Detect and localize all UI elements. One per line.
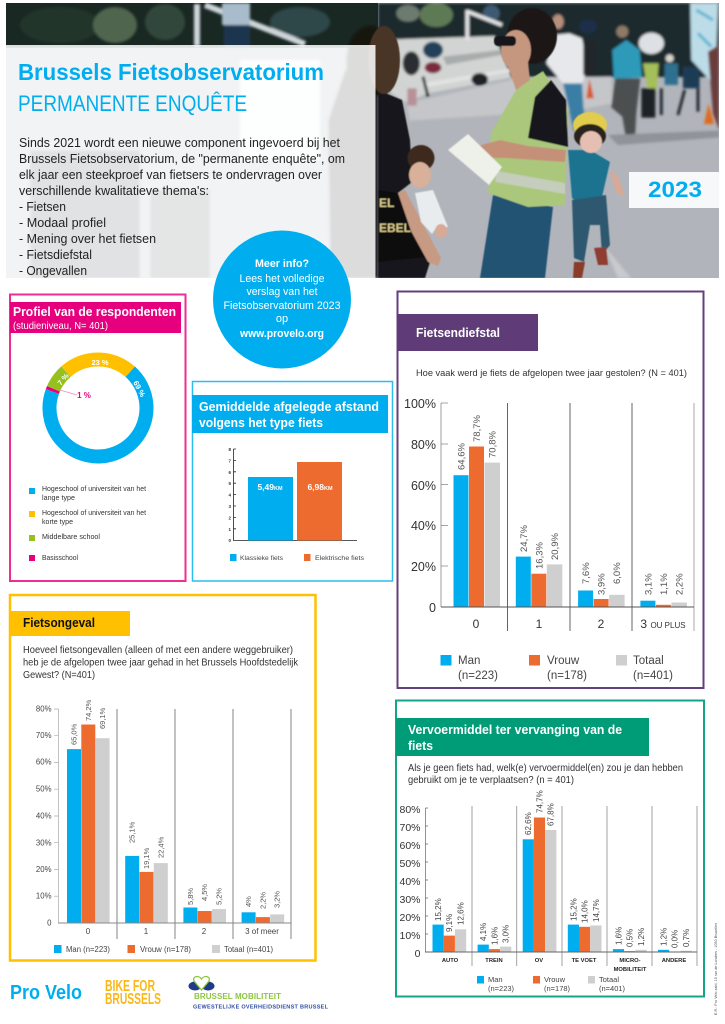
- bar chart: afstand: 5,49KM: [257, 482, 283, 492]
- bar chart: vervoermiddel: MICRO-: [619, 958, 641, 964]
- legend: studieniveau: korte type: [42, 517, 73, 526]
- bar chart: vervoermiddel: 0,0%: [671, 930, 680, 948]
- legend: vervoermiddel: (n=178): [544, 984, 571, 993]
- bar chart: fietsendiefstal: 70,8%: [488, 431, 498, 458]
- callout: meer info: Fietsobservatorium 2023: [224, 300, 340, 312]
- bar chart: fietsongeval: 80%: [36, 704, 52, 714]
- year badge: 2023: [648, 177, 702, 202]
- bar chart: afstand: 5: [228, 481, 231, 486]
- bar chart: fietsendiefstal: 78,7%: [472, 415, 483, 442]
- intro text: Brussels Fietsobservatorium, de "permanente enquête", om: [19, 152, 345, 166]
- bar chart: fietsendiefstal: 100%: [404, 397, 436, 411]
- bar chart: vervoermiddel: 3,0%: [502, 925, 511, 943]
- heading: profiel: Profiel van de respondenten: [13, 304, 176, 319]
- legend: fietsongeval: [54, 945, 273, 954]
- title: Brussels Fietsobservatorium: [18, 59, 324, 85]
- bar chart: fietsendiefstal: 3,1%: [643, 573, 654, 595]
- donut chart: 7 %: [55, 371, 71, 387]
- bar chart: vervoermiddel: 50%: [399, 858, 420, 870]
- legend: studieniveau: Basisschool: [42, 553, 78, 562]
- bar chart: fietsendiefstal: 40%: [411, 519, 436, 533]
- heading: fietsendiefstal: [397, 314, 538, 351]
- intro text: - Ongevallen: [19, 264, 87, 278]
- header photo: EBEL: [379, 221, 411, 235]
- bar chart: fietsongeval: 25,1%: [128, 821, 137, 843]
- bar chart: fietsendiefstal: 0: [473, 617, 480, 631]
- question: fietsongeval: heb je de afgelopen twee jaar gehad in het Brussels Hoofdstedelijk: [23, 658, 298, 668]
- panel: fietsongeval: [10, 595, 316, 960]
- bar chart: vervoermiddel: 1,6%: [490, 927, 499, 945]
- intro text: - Modaal profiel: [19, 216, 106, 230]
- bar chart: vervoermiddel: 70%: [399, 822, 420, 834]
- bar chart: fietsendiefstal: 2: [598, 617, 605, 631]
- bar chart: fietsendiefstal: 60%: [411, 479, 436, 493]
- legend: vervoermiddel: [477, 975, 626, 993]
- legend: vervoermiddel: (n=223): [488, 984, 515, 993]
- callout: meer info: [213, 230, 351, 368]
- bar chart: fietsongeval: 50%: [36, 784, 52, 794]
- bar chart: vervoermiddel: 15,2%: [434, 898, 443, 921]
- bar chart: fietsendiefstal: 24,7%: [519, 525, 530, 552]
- bar chart: fietsongeval: 5,2%: [214, 888, 224, 905]
- bar chart: vervoermiddel: 10%: [399, 930, 420, 942]
- intro text: - Fietsdiefstal: [19, 248, 92, 262]
- intro text: elk jaar een steekproef van fietsers te ondervragen over: [19, 168, 322, 182]
- bar chart: vervoermiddel: 67,8%: [547, 803, 556, 826]
- panel: fietsendiefstal: [397, 292, 704, 688]
- bar chart: vervoermiddel: 1,2%: [637, 928, 646, 946]
- question: fietsongeval: [23, 645, 298, 681]
- callout: meer info: Meer info?: [255, 258, 309, 270]
- legend: afstand: Klassieke fiets: [240, 555, 284, 562]
- callout: meer info: www.provelo.org: [239, 328, 324, 340]
- bar chart: afstand: 2: [228, 515, 231, 520]
- bar chart: afstand: 6: [228, 470, 231, 475]
- panel: profiel van de respondenten: [10, 294, 186, 581]
- bar chart: vervoermiddel: 9,1%: [445, 914, 454, 932]
- logo: brussel mobiliteit: [188, 977, 329, 1010]
- bar chart: fietsongeval: 10%: [36, 892, 52, 900]
- legend: fietsendiefstal: Man: [458, 655, 480, 667]
- bar chart: vervoermiddel: 12,6%: [456, 902, 466, 925]
- callout: meer info: Lees het volledige: [240, 273, 324, 285]
- legend: fietsendiefstal: Vrouw: [547, 655, 580, 667]
- bar chart: fietsongeval: 0: [86, 927, 91, 936]
- bar chart: vervoermiddel: 60%: [399, 840, 420, 852]
- legend: studieniveau: Middelbare school: [42, 532, 100, 541]
- bar chart: fietsendiefstal: 80%: [411, 438, 436, 452]
- bar chart: vervoermiddel: 1,6%: [614, 927, 623, 945]
- bar chart: vervoermiddel: ANDERE: [662, 958, 686, 964]
- legend: studieniveau: lange type: [42, 493, 75, 502]
- legend: studieniveau: Hogeschool of universiteit van het: [42, 484, 147, 493]
- bar chart: fietsongeval: 5,8%: [186, 888, 195, 905]
- legend: fietsendiefstal: [440, 655, 673, 682]
- legend: vervoermiddel: (n=401): [599, 984, 626, 993]
- legend: afstand: [230, 554, 365, 562]
- heading: vervoermiddel: [396, 718, 649, 756]
- legend: fietsendiefstal: (n=178): [547, 670, 587, 682]
- donut chart: 69 %: [131, 379, 147, 399]
- bar chart: vervoermiddel: 62,6%: [524, 812, 533, 835]
- bar chart: fietsendiefstal: 3,9%: [597, 573, 608, 595]
- year badge: [629, 172, 719, 208]
- bar chart: fietsongeval: 1: [144, 927, 149, 936]
- intro text: verschillende kwalitatieve thema's:: [19, 184, 209, 198]
- bar chart: fietsongeval: 2: [202, 927, 207, 936]
- donut chart: [30, 340, 166, 476]
- bar chart: fietsongeval: 70%: [36, 731, 52, 740]
- bar chart: vervoermiddel: 4,1%: [479, 923, 488, 941]
- bar chart: fietsongeval: 65,0%: [70, 723, 78, 745]
- bar chart: fietsongeval: [36, 699, 291, 939]
- bar chart: fietsongeval: 60%: [36, 758, 52, 766]
- legend: fietsongeval: Vrouw (n=178): [140, 945, 191, 954]
- bar chart: afstand: 8: [228, 447, 231, 452]
- bar chart: afstand: 6,98KM: [307, 482, 333, 492]
- question: vervoermiddel: Als je geen fiets had, welk(e) vervoermiddel(en) zou je dan hebben: [408, 762, 683, 774]
- legend: studieniveau: Hogeschool of universiteit van het: [42, 508, 147, 517]
- bar chart: fietsendiefstal: 6,0%: [612, 562, 623, 584]
- bar chart: fietsongeval: 40%: [36, 812, 52, 820]
- bar chart: fietsendiefstal: 0: [429, 601, 436, 615]
- bar chart: fietsongeval: 22,4%: [156, 836, 165, 858]
- header photo: EL: [379, 196, 394, 210]
- bar chart: fietsongeval: 3 of meer: [245, 927, 279, 936]
- legend: fietsendiefstal: (n=401): [633, 670, 673, 682]
- bar chart: afstand: 3: [228, 504, 231, 509]
- bar chart: vervoermiddel: 1,2%: [660, 928, 668, 946]
- logo: bike for brussels: BRUSSELS: [105, 991, 161, 1008]
- legend: fietsendiefstal: Totaal: [633, 655, 664, 667]
- heading: afstand: Gemiddelde afgelegde afstand: [199, 399, 379, 414]
- logo: brussel mobiliteit: GEWESTELIJKE OVERHEIDSDIENST BRUSSEL: [193, 1004, 329, 1010]
- bar chart: vervoermiddel: AUTO: [442, 958, 459, 964]
- bar chart: vervoermiddel: 15,2%: [569, 898, 578, 921]
- bar chart: vervoermiddel: 74,7%: [535, 790, 544, 813]
- panel: gemiddelde afgelegde afstand: [192, 382, 392, 581]
- legend: studieniveau: [29, 484, 147, 562]
- heading: vervoermiddel: Vervoermiddel ter vervanging van de: [408, 722, 622, 737]
- bar chart: vervoermiddel: 0,7%: [682, 929, 691, 947]
- bar chart: fietsongeval: 30%: [36, 838, 52, 848]
- heading: vervoermiddel: fiets: [408, 738, 433, 753]
- heading: fietsongeval: Fietsongeval: [23, 616, 95, 630]
- heading: fietsendiefstal: Fietsendiefstal: [416, 326, 500, 340]
- bar chart: fietsendiefstal: 16,3%: [534, 542, 545, 569]
- bar chart: vervoermiddel: TREIN: [485, 958, 503, 964]
- legend: vervoermiddel: Totaal: [599, 975, 619, 984]
- bar chart: afstand: 0: [228, 538, 231, 543]
- bar chart: fietsendiefstal: 1,1%: [659, 573, 670, 595]
- question: vervoermiddel: gebruikt om je te verplaatsen? (n = 401): [408, 774, 574, 786]
- logo: bike for brussels: [105, 978, 161, 1008]
- legend: vervoermiddel: Man: [488, 975, 503, 984]
- legend: fietsongeval: Man (n=223): [66, 945, 110, 954]
- logo: bike for brussels: BIKE FOR: [105, 978, 155, 995]
- bar chart: afstand: 1: [228, 527, 231, 532]
- bar chart: vervoermiddel: 80%: [399, 804, 420, 816]
- bar chart: fietsongeval: 19,1%: [142, 847, 151, 869]
- bar chart: vervoermiddel: 20%: [399, 912, 420, 924]
- bar chart: fietsendiefstal: [404, 397, 694, 631]
- bar chart: fietsendiefstal: 20,9%: [550, 533, 561, 560]
- bar chart: vervoermiddel: MOBILITEIT: [614, 967, 647, 973]
- panel: vervoermiddel ter vervanging: [396, 700, 704, 996]
- legend: afstand: Elektrische fiets: [315, 555, 365, 562]
- heading: profiel: [10, 302, 181, 333]
- publisher note: E.R.: Pro Velo asbl, 15 rue de Londres - 1050 Bruxelles: [714, 923, 718, 1015]
- bar chart: fietsongeval: 3,2%: [273, 891, 282, 908]
- bar chart: fietsendiefstal: 64,6%: [456, 443, 468, 470]
- bar chart: afstand: 4: [228, 493, 231, 498]
- intro text: - Fietsen: [19, 200, 66, 214]
- bar chart: afstand: [228, 447, 357, 543]
- intro text: Sinds 2021 wordt een nieuwe component ingevoerd bij het: [19, 136, 341, 150]
- bar chart: vervoermiddel: OV: [535, 958, 543, 964]
- heading: afstand: [192, 395, 388, 433]
- bar chart: vervoermiddel: [399, 790, 697, 973]
- bar chart: fietsendiefstal: 3 OU PLUS: [640, 617, 686, 631]
- bar chart: fietsongeval: 4%: [244, 896, 253, 907]
- legend: vervoermiddel: Vrouw: [544, 975, 566, 984]
- bar chart: fietsongeval: 74,2%: [84, 699, 93, 721]
- question: vervoermiddel: [408, 762, 683, 786]
- question: fietsendiefstal: Hoe vaak werd je fiets de afgelopen twee jaar gestolen? (N = 401): [416, 368, 687, 379]
- callout: meer info: op: [276, 313, 288, 325]
- callout: meer info: verslag van het: [246, 286, 318, 298]
- bar chart: vervoermiddel: 0: [415, 948, 421, 960]
- bar chart: vervoermiddel: 30%: [399, 894, 420, 906]
- heading: profiel: (studieniveau, N= 401): [13, 320, 108, 332]
- bar chart: vervoermiddel: 14,7%: [592, 899, 601, 922]
- bar chart: fietsendiefstal: 2,2%: [674, 573, 685, 595]
- donut chart: 23 %: [91, 358, 109, 367]
- bar chart: fietsendiefstal: 20%: [411, 560, 436, 574]
- intro text: [19, 136, 345, 278]
- heading: fietsongeval: [10, 611, 130, 636]
- header photo: [6, 3, 719, 278]
- bar chart: fietsongeval: 0: [47, 918, 52, 928]
- legend: fietsongeval: Totaal (n=401): [224, 945, 273, 954]
- logo: brussel mobiliteit: BRUSSEL MOBILITEIT: [194, 992, 281, 1001]
- intro text: - Mening over het fietsen: [19, 232, 156, 246]
- bar chart: vervoermiddel: 0,5%: [626, 929, 635, 947]
- bar chart: fietsongeval: 4,5%: [200, 884, 209, 901]
- heading: afstand: volgens het type fiets: [199, 415, 323, 430]
- donut chart: 1 %: [77, 391, 91, 400]
- bar chart: fietsendiefstal: 7,6%: [581, 562, 592, 584]
- bar chart: vervoermiddel: 40%: [399, 876, 420, 888]
- bar chart: afstand: 7: [228, 458, 231, 464]
- bar chart: fietsongeval: 69,1%: [98, 707, 107, 729]
- question: fietsongeval: Gewest? (N=401): [23, 670, 95, 681]
- bar chart: vervoermiddel: 14,0%: [580, 900, 590, 923]
- panel: intro: [6, 45, 376, 278]
- bar chart: fietsendiefstal: 1: [536, 617, 543, 631]
- bar chart: fietsongeval: 20%: [36, 865, 52, 874]
- bar chart: fietsongeval: 2,2%: [258, 892, 267, 909]
- question: fietsongeval: Hoeveel fietsongevallen (alleen of met een andere weggebruiker): [23, 645, 293, 656]
- bar chart: vervoermiddel: TE VOET: [572, 958, 597, 964]
- legend: fietsendiefstal: (n=223): [458, 670, 498, 682]
- logo: pro velo: Pro Velo: [10, 982, 82, 1004]
- subtitle: PERMANENTE ENQUÊTE: [18, 91, 247, 116]
